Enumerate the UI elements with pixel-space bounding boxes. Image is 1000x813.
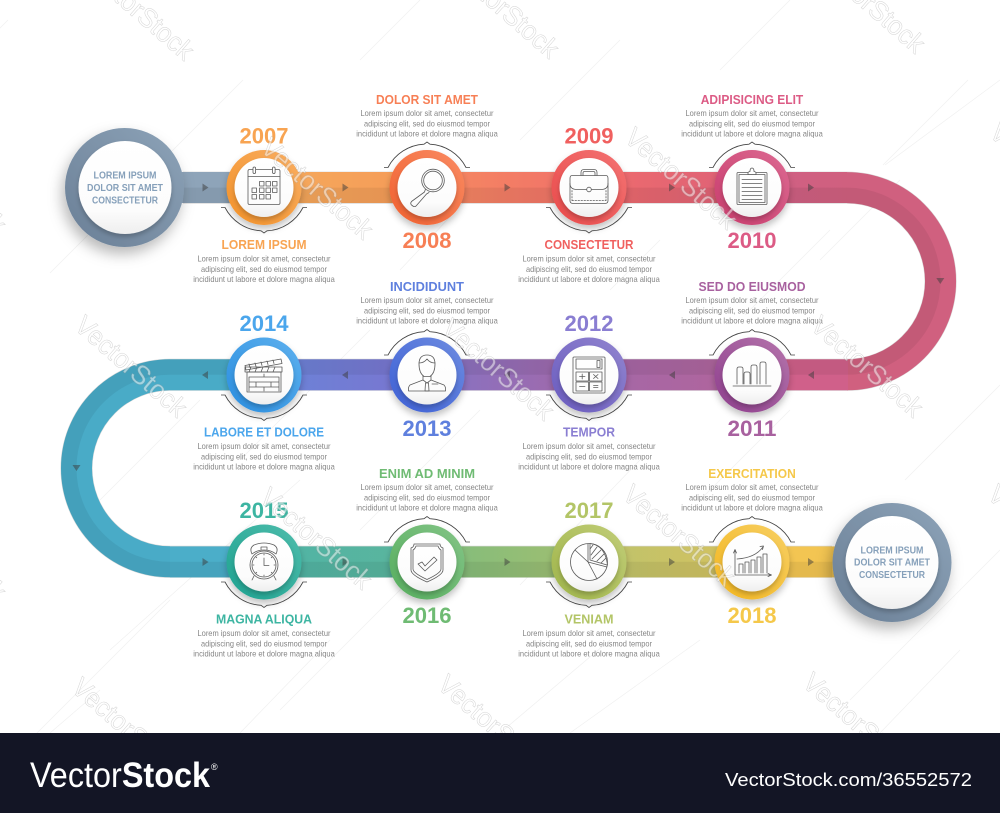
ring <box>390 150 464 225</box>
disc <box>398 346 456 404</box>
bracket <box>546 395 632 420</box>
watermarks: VectorStock <box>69 310 193 423</box>
description: adipiscing elit, sed do eiusmod tempor <box>689 494 815 502</box>
ribbon left curve <box>77 375 170 562</box>
icon: person <box>408 355 446 391</box>
ring <box>390 524 464 600</box>
end text: LOREM IPSUM <box>860 545 924 556</box>
ribbon segment mauve <box>589 359 752 390</box>
arrows <box>72 184 944 566</box>
icon: calendar <box>248 167 280 204</box>
ribbon shadow edge <box>77 188 941 562</box>
ribbon segment red <box>589 172 752 203</box>
heading: INCIDIDUNT <box>390 280 464 294</box>
description: incididunt ut labore et dolore magna aliqua <box>356 130 498 138</box>
year: 2007 <box>240 124 288 148</box>
description <box>356 296 498 326</box>
disc <box>722 532 782 592</box>
description <box>356 483 498 512</box>
disc <box>722 346 782 404</box>
start text: DOLOR SIT AMET <box>87 183 164 194</box>
description: incididunt ut labore et dolore magna aliqua <box>518 462 660 472</box>
heading: EXERCITATION <box>708 467 796 481</box>
milestone 2017 <box>518 498 660 658</box>
ribbon segment orange <box>264 172 427 203</box>
description: Lorem ipsum dolor sit amet, consectetur <box>686 296 819 305</box>
start circle <box>65 128 184 247</box>
end text <box>854 545 931 581</box>
milestone 2009 <box>518 124 660 284</box>
ring <box>226 524 302 600</box>
ribbon segment green <box>427 546 589 577</box>
ribbon segment pink <box>752 172 847 203</box>
heading: MAGNA ALIQUA <box>216 612 312 626</box>
disc <box>722 158 782 217</box>
year: 2008 <box>402 228 452 253</box>
ribbon segment green-teal <box>264 546 427 577</box>
description: incididunt ut labore et dolore magna aliqua <box>681 316 823 326</box>
description: adipiscing elit, sed do eiusmod tempor <box>364 306 490 316</box>
ribbon start segment <box>175 172 265 203</box>
description <box>681 296 823 326</box>
milestone 2018 <box>681 467 823 628</box>
description: Lorem ipsum dolor sit amet, consectetur <box>360 296 494 305</box>
ribbon segment teal bottom <box>170 546 264 577</box>
icon: shield <box>411 544 443 582</box>
footer bar <box>0 733 1000 813</box>
heading: CONSECTETUR <box>544 238 634 252</box>
start disc <box>78 141 172 234</box>
milestone 2015 <box>193 498 335 658</box>
year: 2017 <box>564 498 614 523</box>
ring <box>226 150 302 225</box>
description: Lorem ipsum dolor sit amet, consectetur <box>198 629 331 638</box>
description: adipiscing elit, sed do eiusmod tempor <box>526 452 652 462</box>
start text: LOREM IPSUM <box>94 171 156 182</box>
watermarks: VectorStock <box>432 669 556 782</box>
milestone 2010 <box>681 93 823 253</box>
description: Lorem ipsum dolor sit amet, consectetur <box>360 109 494 118</box>
ribbon segment olive <box>589 546 752 577</box>
end circle <box>832 503 952 622</box>
end ring <box>832 503 952 622</box>
ring <box>390 338 464 412</box>
bracket <box>546 582 632 608</box>
start ring <box>65 128 184 247</box>
description: incididunt ut labore et dolore magna aliqua <box>681 504 823 512</box>
icon: magnifier <box>411 169 444 207</box>
description: adipiscing elit, sed do eiusmod tempor <box>364 494 490 502</box>
icon: growth chart <box>734 546 772 576</box>
icon: briefcase <box>570 170 608 204</box>
year: 2013 <box>402 416 452 441</box>
year: 2018 <box>728 603 776 628</box>
ribbon darker half stripe <box>69 195 933 570</box>
description: Lorem ipsum dolor sit amet, consectetur <box>522 629 656 638</box>
footer registered mark: ® <box>211 762 218 772</box>
description <box>518 442 660 472</box>
description: Lorem ipsum dolor sit amet, consectetur <box>198 442 331 451</box>
watermarks: VectorStock <box>66 672 190 785</box>
milestone 2011 <box>681 280 823 441</box>
ring <box>552 524 626 600</box>
description: adipiscing elit, sed do eiusmod tempor <box>689 306 815 316</box>
watermarks: VectorStock <box>436 313 560 426</box>
start text <box>87 171 164 206</box>
description: Lorem ipsum dolor sit amet, consectetur <box>360 483 494 492</box>
watermarks: VectorStock <box>617 479 741 592</box>
heading: LABORE ET DOLORE <box>204 426 324 440</box>
ribbon segment teal top <box>170 359 264 390</box>
icon: bar chart <box>733 362 771 386</box>
description <box>518 254 660 284</box>
footer background <box>0 733 1000 813</box>
disc <box>560 346 618 404</box>
description <box>681 483 823 512</box>
year: 2010 <box>728 228 776 253</box>
heading: VENIAM <box>564 612 614 626</box>
description: incididunt ut labore et dolore magna aliqua <box>193 275 335 284</box>
description: Lorem ipsum dolor sit amet, consectetur <box>522 442 656 451</box>
timeline ribbon <box>69 172 941 577</box>
ring <box>714 338 790 412</box>
icon: clipboard <box>737 168 767 204</box>
footer url: VectorStock.com/36552572 <box>725 769 972 790</box>
year: 2009 <box>564 124 614 148</box>
description <box>193 442 335 472</box>
ribbon segment violet <box>427 359 589 390</box>
description: incididunt ut labore et dolore magna aliqua <box>356 504 498 512</box>
ribbon segment rose <box>752 359 848 390</box>
ribbon segment yellow <box>752 546 837 577</box>
milestone 2012 <box>518 311 660 472</box>
bracket <box>221 208 307 233</box>
watermarks: VectorStock <box>254 482 378 595</box>
description: incididunt ut labore et dolore magna aliqua <box>518 275 660 284</box>
end text: CONSECTETUR <box>859 570 925 581</box>
ring <box>552 338 626 412</box>
disc <box>234 346 294 404</box>
description: adipiscing elit, sed do eiusmod tempor <box>364 120 490 128</box>
description <box>193 254 335 284</box>
watermarks: VectorStock <box>255 132 379 245</box>
icon: calculator <box>573 357 605 393</box>
icon: pie chart <box>570 544 608 580</box>
bracket <box>221 395 307 420</box>
ribbon right curve <box>847 188 941 375</box>
milestone 2016 <box>356 467 498 628</box>
year: 2015 <box>240 498 288 523</box>
end disc <box>846 516 938 609</box>
heading: SED DO EIUSMOD <box>698 280 806 294</box>
disc <box>398 532 456 592</box>
watermarks: VectorStock <box>619 122 743 235</box>
description: adipiscing elit, sed do eiusmod tempor <box>526 640 652 648</box>
disc <box>560 532 618 592</box>
year: 2016 <box>402 603 452 628</box>
bracket <box>221 582 307 608</box>
bracket <box>709 142 795 168</box>
year: 2012 <box>564 311 614 336</box>
description: incididunt ut labore et dolore magna aliqua <box>356 316 498 326</box>
milestone 2013 <box>356 280 498 441</box>
year: 2011 <box>728 416 776 441</box>
description: incididunt ut labore et dolore magna aliqua <box>681 130 823 138</box>
ribbon segment blue <box>264 359 427 390</box>
description <box>518 629 660 658</box>
description: adipiscing elit, sed do eiusmod tempor <box>689 120 815 128</box>
description: adipiscing elit, sed do eiusmod tempor <box>201 452 327 462</box>
bracket <box>709 516 795 542</box>
description: incididunt ut labore et dolore magna aliqua <box>193 462 335 472</box>
disc <box>234 158 294 217</box>
disc <box>234 532 294 592</box>
end text: DOLOR SIT AMET <box>854 558 931 569</box>
icon: clapperboard <box>245 359 282 392</box>
description: incididunt ut labore et dolore magna aliqua <box>518 650 660 658</box>
heading: TEMPOR <box>563 426 615 440</box>
footer logo: VectorStock <box>30 756 210 795</box>
description: adipiscing elit, sed do eiusmod tempor <box>201 640 327 648</box>
description: Lorem ipsum dolor sit amet, consectetur <box>198 254 331 264</box>
description <box>681 109 823 138</box>
year: 2014 <box>240 311 289 336</box>
description <box>193 629 335 658</box>
heading: DOLOR SIT AMET <box>376 93 478 107</box>
bracket <box>384 142 470 168</box>
disc <box>560 158 618 217</box>
bracket <box>384 330 470 355</box>
icon: alarm clock <box>250 543 278 580</box>
description: Lorem ipsum dolor sit amet, consectetur <box>522 254 656 264</box>
disc <box>398 158 456 217</box>
description <box>356 109 498 138</box>
description: adipiscing elit, sed do eiusmod tempor <box>526 265 652 274</box>
start text: CONSECTETUR <box>92 195 158 206</box>
description: Lorem ipsum dolor sit amet, consectetur <box>686 483 819 492</box>
milestone 2007 <box>193 124 335 284</box>
bracket <box>709 330 795 355</box>
heading: ADIPISICING ELIT <box>701 93 804 107</box>
watermarks: VectorStock <box>805 310 929 423</box>
ring <box>714 524 790 600</box>
milestone 2008 <box>356 93 498 253</box>
ring <box>226 338 302 412</box>
heading: ENIM AD MINIM <box>379 467 475 481</box>
ring <box>714 150 790 225</box>
milestone 2014 <box>193 311 335 472</box>
heading: LOREM IPSUM <box>222 238 306 252</box>
description: adipiscing elit, sed do eiusmod tempor <box>201 265 327 274</box>
description: Lorem ipsum dolor sit amet, consectetur <box>686 109 819 118</box>
ring <box>552 150 626 225</box>
bracket <box>546 208 632 233</box>
description: incididunt ut labore et dolore magna aliqua <box>193 650 335 658</box>
watermarks: VectorStock <box>797 667 921 780</box>
bracket <box>384 516 470 542</box>
ribbon segment coral <box>427 172 589 203</box>
